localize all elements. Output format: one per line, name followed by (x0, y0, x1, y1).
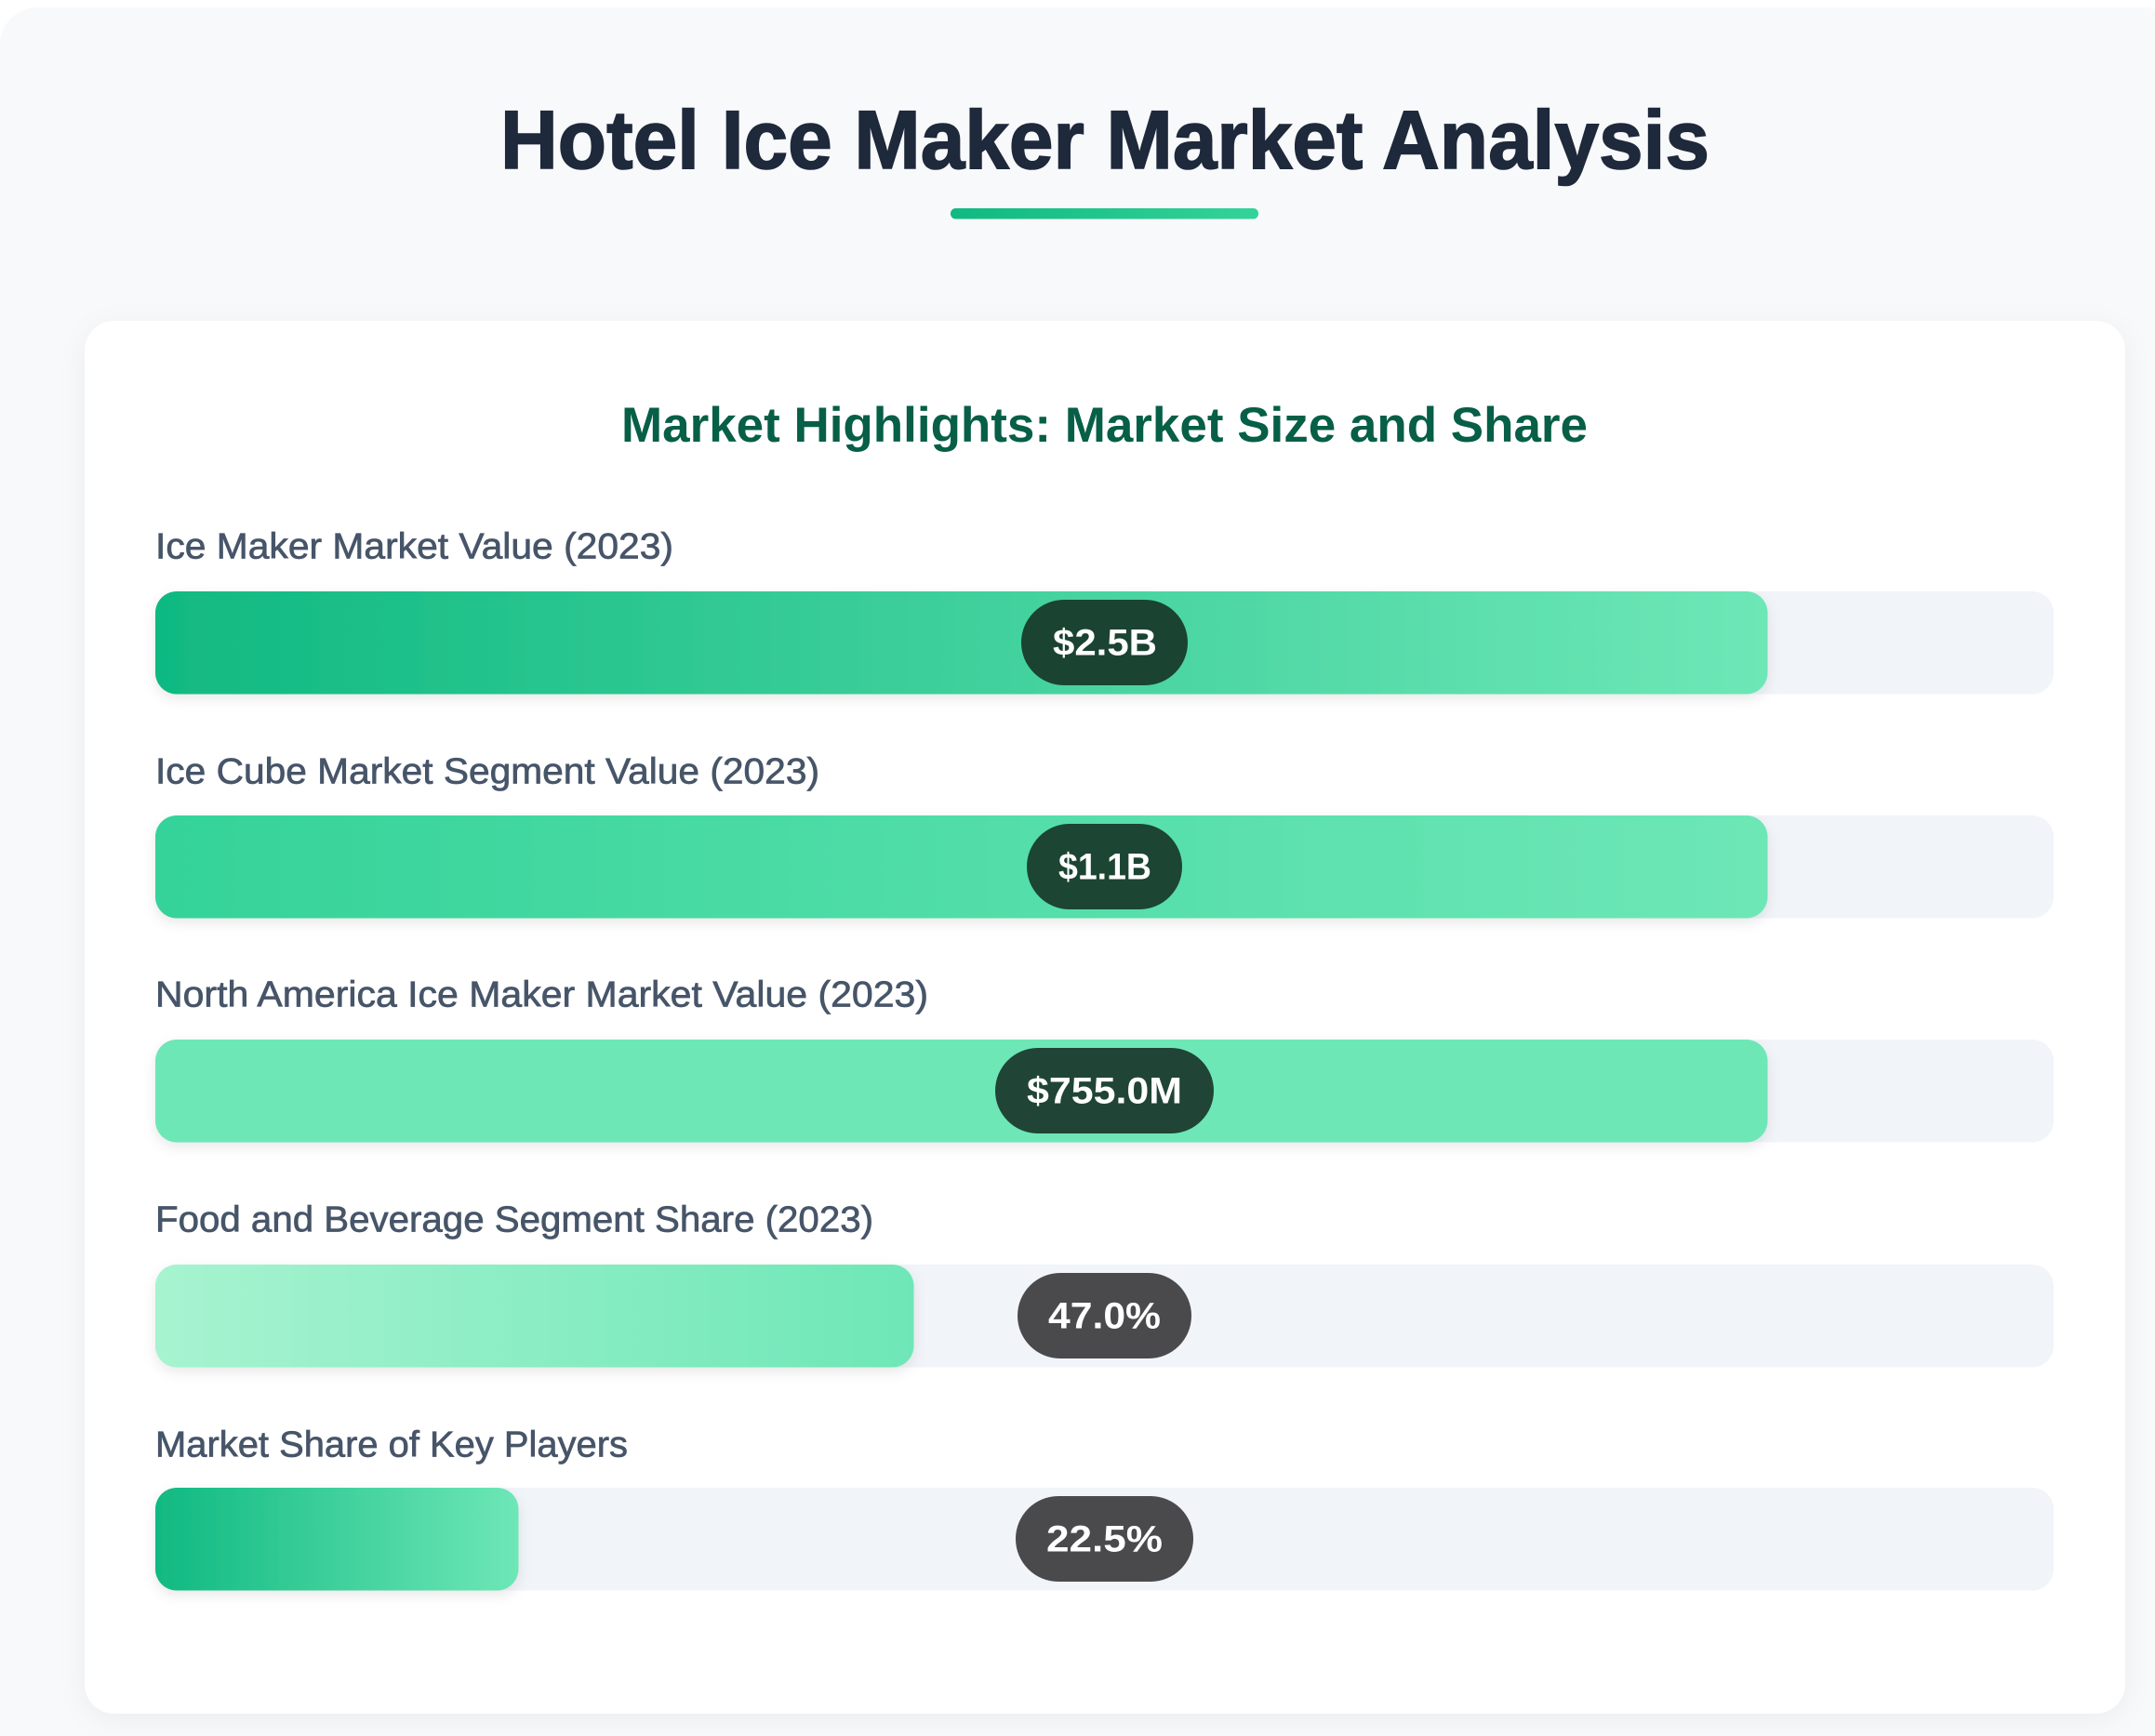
row: ice maker market value (155, 526, 2054, 694)
panel: market highlights (85, 321, 2125, 1714)
value pill (995, 1048, 1214, 1133)
value pill: 47.0% (1048, 1296, 1161, 1337)
title underline (951, 208, 1258, 219)
row: key players share (155, 1425, 2054, 1590)
panel heading: Market Highlights: Market Size and Share (621, 398, 1588, 453)
value pill (1016, 1496, 1193, 1582)
value pill (1018, 1273, 1191, 1358)
bar fill (155, 591, 1767, 694)
bar track (155, 815, 2054, 919)
bar fill (155, 1040, 1767, 1142)
row: ice cube segment value (155, 751, 2054, 919)
label: Ice Maker Market Value (2023) (155, 526, 673, 567)
value pill (1021, 600, 1188, 685)
bar track (155, 1265, 2054, 1367)
bar fill (155, 1488, 519, 1590)
bar fill (155, 815, 1767, 919)
value pill: $2.5B (1053, 623, 1157, 664)
bar track (155, 591, 2054, 694)
bar track (155, 1488, 2054, 1590)
value pill: 22.5% (1046, 1519, 1163, 1560)
row: north america market value (155, 974, 2054, 1142)
value pill (1027, 824, 1182, 909)
label: Ice Cube Market Segment Value (2023) (155, 751, 819, 792)
title: Hotel Ice Maker Market Analysis (500, 93, 1709, 186)
label: Market Share of Key Players (155, 1425, 628, 1465)
label: North America Ice Maker Market Value (2023) (155, 974, 928, 1015)
bar fill (155, 1265, 913, 1367)
value pill: $1.1B (1058, 846, 1151, 887)
bar track (155, 1040, 2054, 1142)
value pill: $755.0M (1027, 1071, 1182, 1112)
label: Food and Beverage Segment Share (2023) (155, 1199, 873, 1240)
row: food and beverage share (155, 1199, 2054, 1367)
